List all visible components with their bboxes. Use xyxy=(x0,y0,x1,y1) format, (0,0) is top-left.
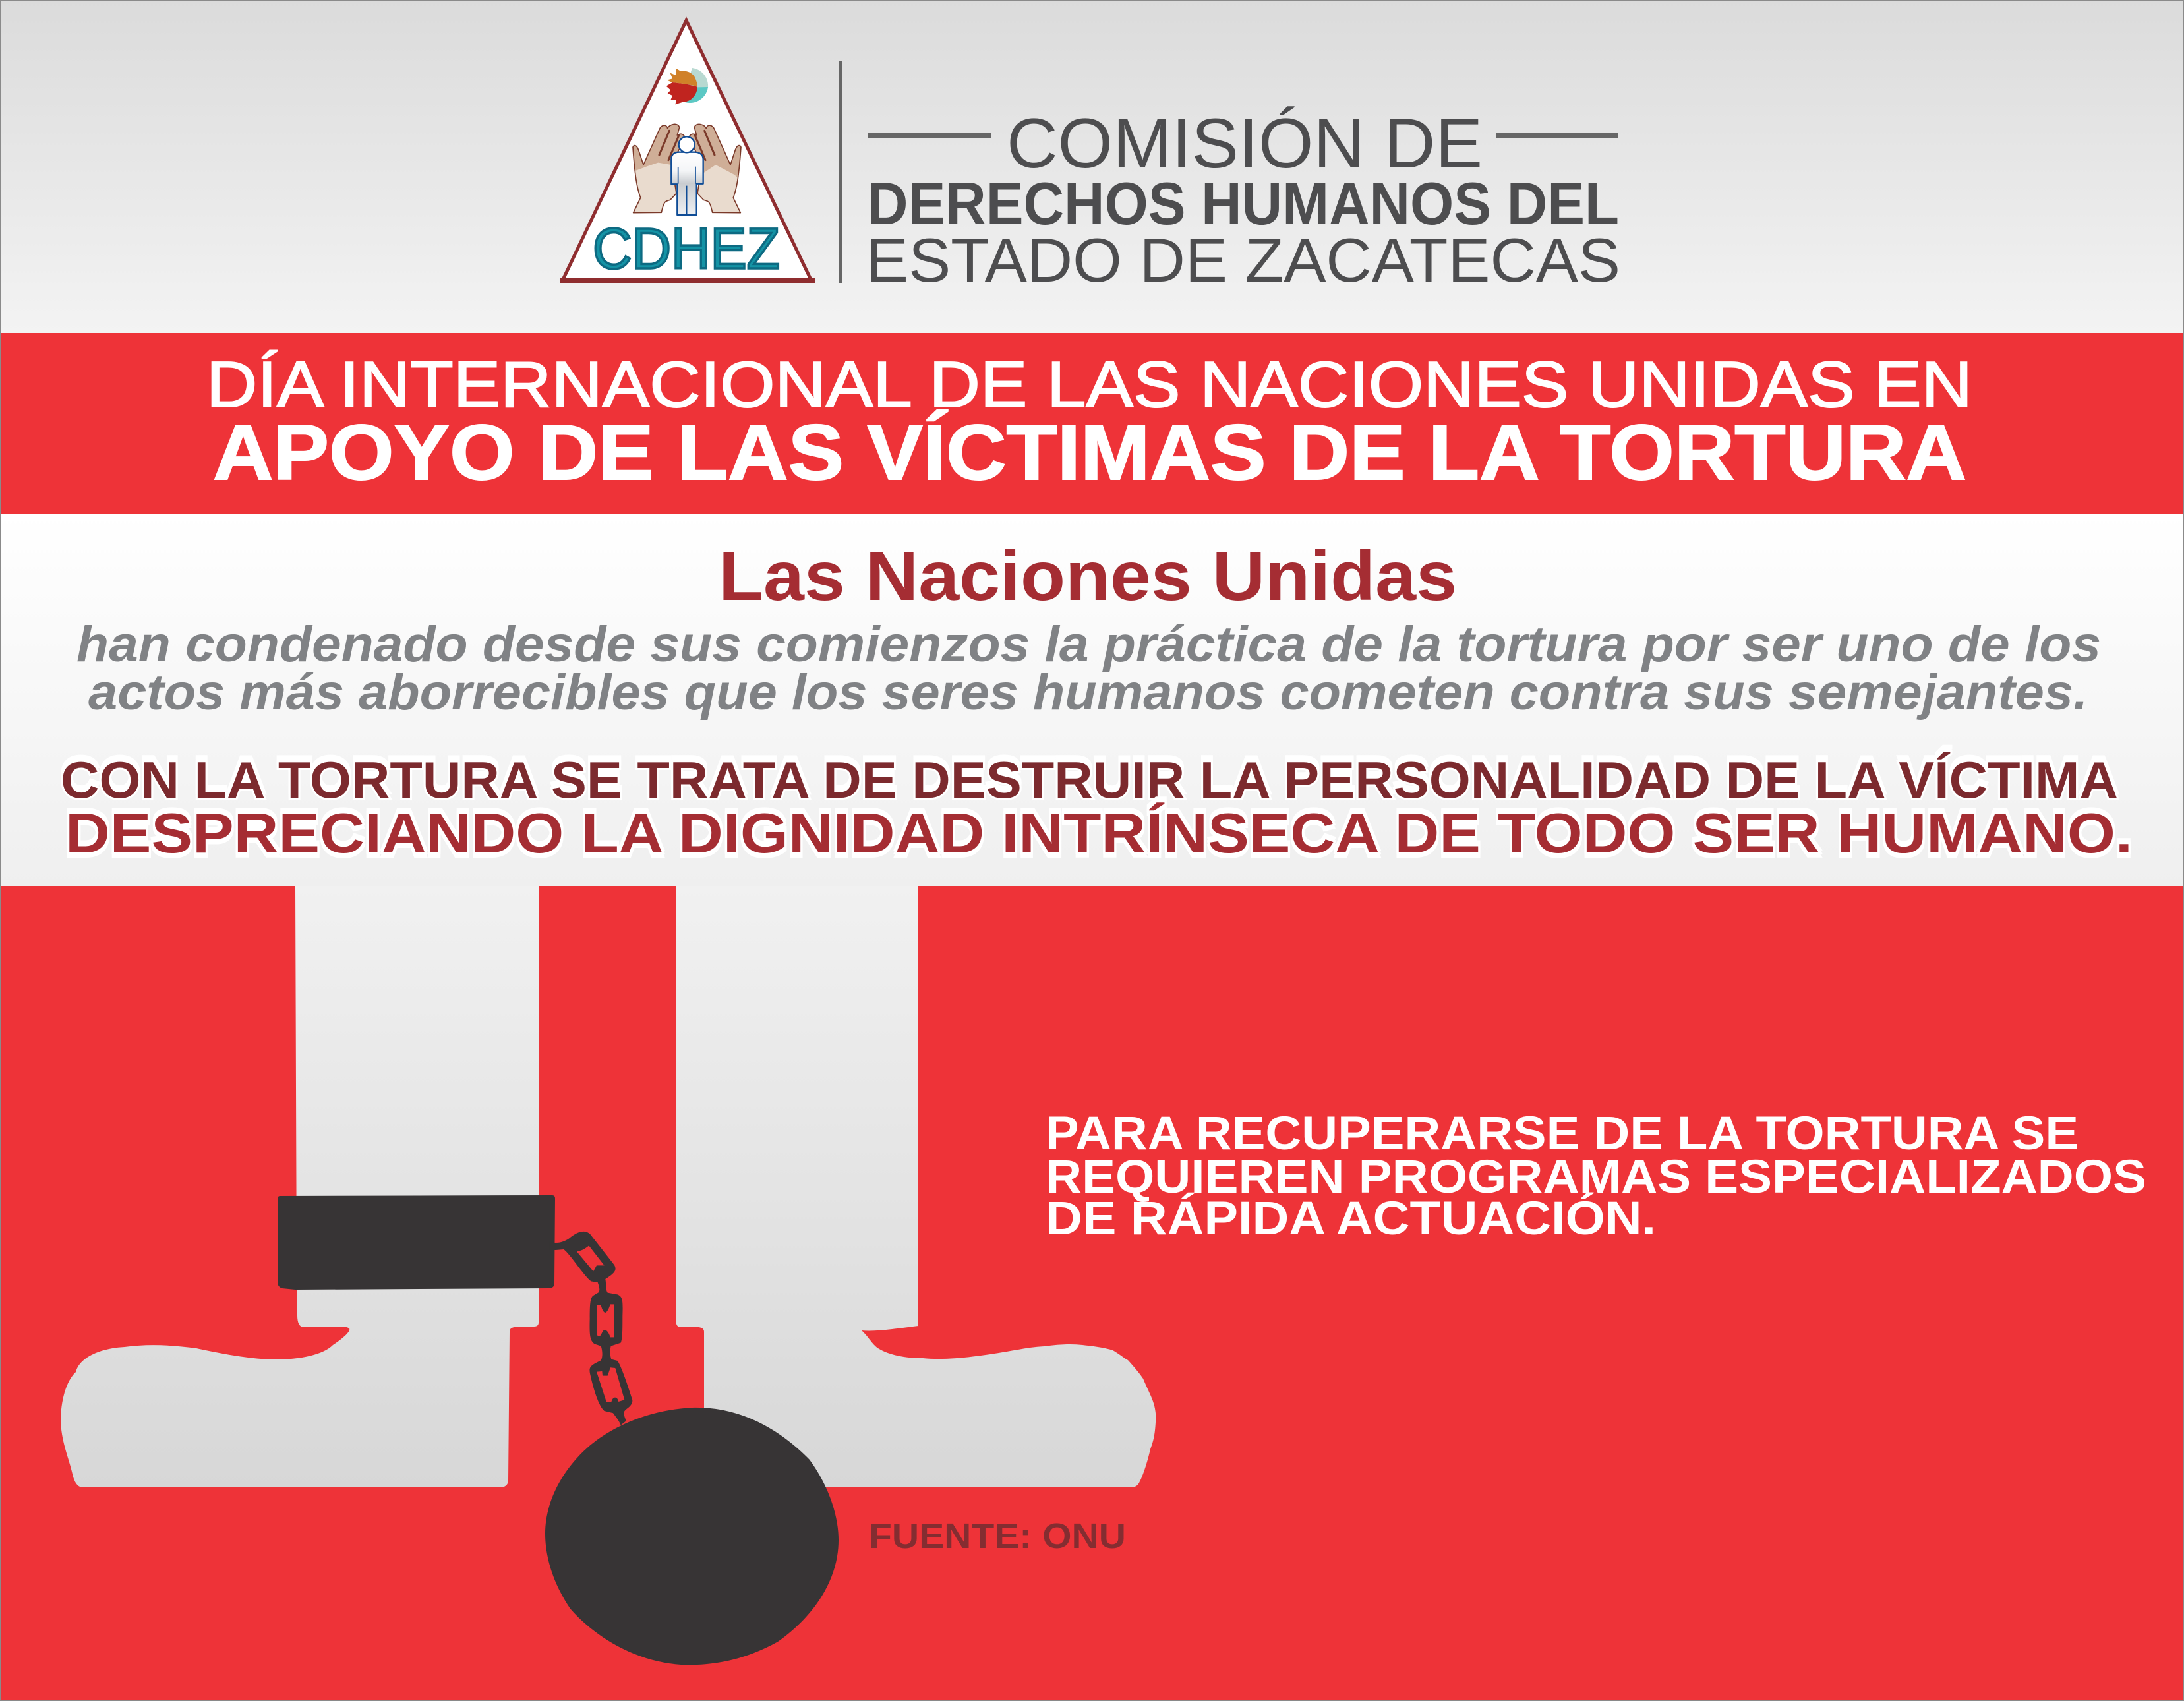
heading: Estado de Zacatecas: ESTADO DE ZACATECAS xyxy=(866,225,1620,295)
statement line 1: han condenado desde sus comienzos la práctica de la tortura por ser uno de los xyxy=(76,616,2101,672)
title line 1: DÍA INTERNACIONAL DE LAS NACIONES UNIDAS EN xyxy=(206,348,1972,421)
icon: sun and moon xyxy=(666,68,708,104)
organization name text xyxy=(866,104,1620,295)
recovery line 3: DE RÁPIDA ACTUACIÓN. xyxy=(1046,1193,1656,1245)
right leg and foot xyxy=(676,886,1156,1487)
text block: recovery message xyxy=(1046,1108,2146,1245)
panel: red title band xyxy=(0,333,2184,514)
organization name divider xyxy=(839,61,842,283)
statement line 2: actos más aborrecibles que los seres humanos cometen contra sus semejantes. xyxy=(88,665,2088,721)
logo wordmark CDHEZ: CDHEZ xyxy=(593,217,780,281)
emphasis line 2: DESPRECIANDO LA DIGNIDAD INTRÍNSECA DE TODO SER HUMANO. xyxy=(65,802,2133,865)
title line 2: APOYO DE LAS VÍCTIMAS DE LA TORTURA xyxy=(213,409,1966,496)
right rule xyxy=(1496,133,1618,138)
icon: left hand xyxy=(631,124,685,216)
heading: Derechos Humanos del: DERECHOS HUMANOS DEL xyxy=(868,171,1619,237)
logo triangle thick base xyxy=(560,278,815,283)
logo triangle outline xyxy=(562,20,812,281)
panel: header background xyxy=(0,0,2184,333)
chain xyxy=(549,1232,632,1425)
recovery line 2: REQUIEREN PROGRAMAS ESPECIALIZADOS xyxy=(1046,1151,2146,1203)
icon: right hand xyxy=(689,124,743,216)
recovery line 1: PARA RECUPERARSE DE LA TORTURA SE xyxy=(1046,1108,2079,1160)
illustration: shackled legs xyxy=(61,886,1156,1665)
logo emblem: hands, person and sun xyxy=(631,68,743,216)
iron ball xyxy=(545,1408,839,1665)
heading: Comisión de: COMISIÓN DE xyxy=(1007,104,1483,183)
logo: CDHEZ triangle xyxy=(560,20,815,283)
title in red band xyxy=(206,348,1972,496)
heading: Las Naciones Unidas: Las Naciones Unidas xyxy=(719,537,1457,615)
panel: red illustration area xyxy=(0,886,2184,1701)
shackle cuff xyxy=(278,1195,555,1290)
emphasis line 1: CON LA TORTURA SE TRATA DE DESTRUIR LA PERSONALIDAD DE LA VÍCTIMA xyxy=(61,751,2118,809)
left leg and foot xyxy=(61,886,539,1487)
left rule xyxy=(868,133,991,138)
text block: emphasis statement xyxy=(61,751,2133,865)
text block: condemnation statement xyxy=(76,616,2101,721)
panel: body text background xyxy=(0,514,2184,886)
icon: human figure xyxy=(671,136,703,215)
source note: FUENTE: ONU xyxy=(869,1516,1126,1556)
